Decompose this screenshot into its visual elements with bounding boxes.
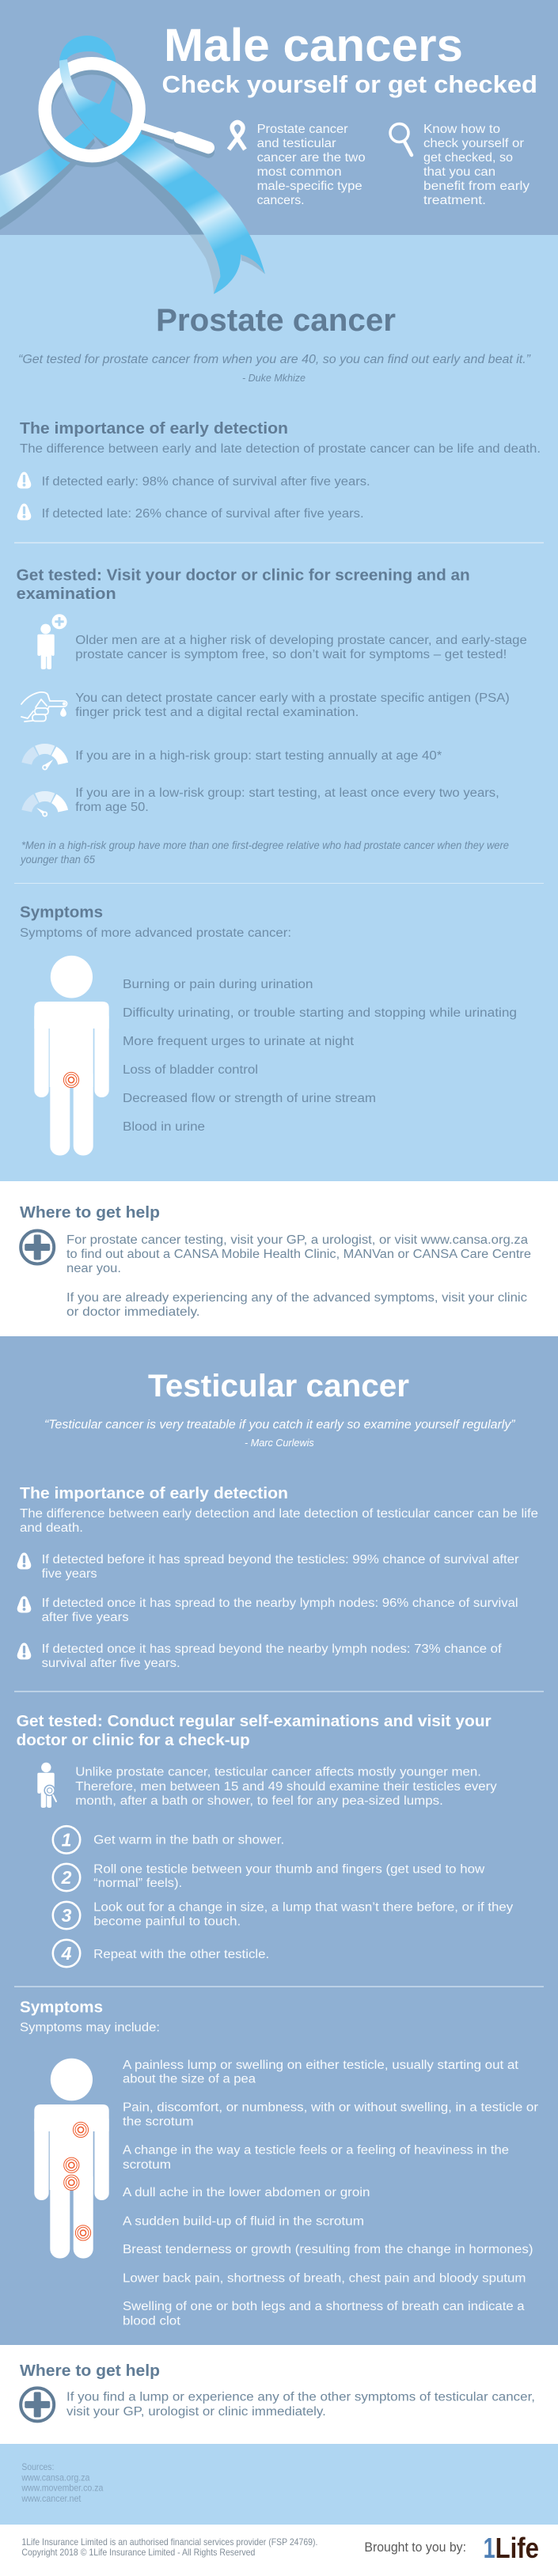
help text: visit your GP, urologist or clinic immediately. [66,2405,326,2419]
heading: The importance of early detection [20,1485,288,1502]
text block: know how to check: get checked, so [423,151,513,165]
step 2 [53,1862,485,1891]
text block: know how to check: check yourself or [423,137,524,150]
icon: alert [17,1642,31,1660]
heading: Where to get help [20,2362,160,2380]
intro text: Symptoms of more advanced prostate cancer: [20,926,291,940]
symptom list: Decreased flow or strength of urine stream [123,1092,376,1105]
text: PSA test: finger prick test and a digital rectal examination. [75,706,359,719]
quote: Duke Mkhize [18,353,531,384]
heading: prostate cancer: Prostate cancer [156,303,396,338]
icon: alert [17,1552,31,1570]
step 3 [53,1901,513,1929]
help text: If you are already experiencing any of the advanced symptoms, visit your clinic [66,1291,527,1305]
icon: low risk gauge [27,797,63,816]
text: older men [75,634,527,661]
text block: two most common cancers: most common [257,165,342,179]
sources: www.cansa.org.za [21,2472,90,2483]
symptom list: A dull ache in the lower abdomen or groin [123,2186,370,2199]
sources: Sources: [21,2461,54,2472]
intro text: Symptoms may include: [20,2021,160,2035]
text: low risk group: If you are in a low-risk group: start testing, at least once every two years, [75,786,499,800]
symptom list: Breast tenderness or growth (resulting from the change in hormones) [123,2243,533,2256]
text: older men: Older men are at a higher risk of developing prostate cancer, and early-stage [75,634,527,647]
text: PSA test: You can detect prostate cancer early with a prostate specific antigen (PSA) [75,691,510,705]
quote: Duke Mkhize: - Duke Mkhize [242,373,306,384]
heading: Symptoms [20,1999,103,2017]
symptom list: A change in the way a testicle feels or a feeling of heaviness in the [123,2143,509,2157]
text block: two most common cancers: and testicular [257,137,336,150]
section: prostate where to get help [20,1204,531,1319]
section: prostate symptoms [20,903,517,1155]
symptom list: scrotum [123,2158,171,2172]
symptom list: Swelling of one or both legs and a shortness of breath can indicate a [123,2300,525,2313]
symptom list: Difficulty urinating, or trouble starting and stopping while urinating [123,1006,517,1020]
section: testicular importance of early detection [17,1485,538,1670]
intro text: The difference between early detection and late detection of testicular cancer can be life [20,1507,538,1521]
text: younger men: Unlike prostate cancer, testicular cancer affects mostly younger men. [75,1766,481,1779]
text block: two most common cancers: male-specific type [257,180,363,193]
step 2: Roll one testicle between your thumb and fingers (get used to how [93,1862,485,1877]
step 4 [53,1940,269,1967]
heading: doctor or clinic for a check-up [17,1732,250,1749]
intro text [20,1507,538,1535]
step 4: Repeat with the other testicle. [93,1948,269,1961]
icon: alert [17,472,31,489]
symptom list: Blood in urine [123,1120,205,1134]
icon: body figure with prostate target [34,956,109,1155]
panel: footer background [0,2525,558,2576]
symptom list: Lower back pain, shortness of breath, chest pain and bloody sputum [123,2271,526,2285]
text: younger men: month, after a bath or shower, to feel for any pea-sized lumps. [75,1794,443,1808]
icon: alert [17,503,31,521]
icon: man with magnifier [37,1763,56,1808]
text block: two most common cancers: cancers. [257,194,305,207]
icon: alert [17,1597,31,1612]
heading [17,566,470,603]
heading: Where to get help [20,1204,160,1222]
step 1 [53,1826,284,1854]
quote: Marc Curlewis: “Testicular cancer is very treatable if you catch it early so examine yourself regularly” [44,1419,515,1432]
symptom list [123,2059,538,2328]
panel: testicular where to get help background [0,2345,558,2444]
help text: or doctor immediately. [66,1305,200,1319]
text block: two most common cancers: Prostate cancer [257,123,348,136]
icon: small magnifier [390,123,412,155]
panel: sources background [0,2444,558,2525]
step 2: “normal” feels). [93,1877,182,1890]
stat: before spread [42,1553,519,1581]
icon: plus circle [21,2388,54,2421]
footnote: *Men in a high-risk group have more than one first-degree relative who had prostate cancer when they were [21,839,509,851]
section: testicular where to get help [20,2362,535,2421]
symptom list: the scrotum [123,2116,193,2129]
icon: body figure with four targets [34,2059,109,2258]
footer legal text [21,2536,317,2558]
stat: beyond lymph nodes [42,1642,502,1670]
text block: know how to check: Know how to [423,123,500,136]
quote: Marc Curlewis [44,1419,515,1449]
step 3: Look out for a change in size, a lump that wasn’t there before, or if they [93,1901,513,1915]
section: prostate get tested [17,566,527,866]
panel: prostate cancer background [0,235,558,1181]
quote: Duke Mkhize: “Get tested for prostate cancer from when you are 40, so you can find out early and beat it.” [18,353,531,366]
icon: small ribbon [229,122,245,150]
footer legal text: 1Life Insurance Limited is an authorised financial services provider (FSP 24769). [21,2536,317,2548]
icon: awareness ribbon with magnifying glass [0,36,265,294]
text block: two most common cancers: cancer are the two [257,151,366,165]
heading: Get tested: Conduct regular self-examinations and visit your [17,1713,492,1730]
symptom list: about the size of a pea [123,2073,256,2086]
step 2: 2 [61,1867,72,1888]
text block: know how to check: treatment. [423,194,486,207]
heading: testicular cancer: Testicular cancer [148,1369,409,1404]
heading: The importance of early detection [20,420,288,438]
stat: beyond lymph nodes: If detected once it has spread beyond the nearby lymph nodes: 73% chance of [42,1642,502,1656]
symptom list: Pain, discomfort, or numbness, with or without swelling, in a testicle or [123,2101,538,2114]
panel: prostate where to get help background [0,1181,558,1336]
footnote: younger than 65 [20,854,95,866]
section: prostate importance of early detection [17,420,541,521]
help text: If you find a lump or experience any of the other symptoms of testicular cancer, [66,2390,535,2404]
icon: finger prick hand [21,692,67,722]
text block: two most common cancers [257,123,366,207]
stat: before spread: five years [42,1567,97,1581]
brought to you by: Brought to you by: [364,2540,466,2555]
heading: examination [17,585,116,603]
heading [17,1713,492,1749]
text: PSA test [75,691,510,719]
icon: man with plus [37,614,66,669]
help text [66,2390,535,2419]
symptom list: blood clot [123,2314,181,2328]
footnote [20,839,509,866]
text block: know how to check: benefit from early [423,180,530,193]
help text [66,1233,531,1319]
stat: nearby lymph nodes [42,1597,518,1624]
sources [21,2461,104,2504]
help text: For prostate cancer testing, visit your GP, a urologist, or visit www.cansa.org.za [66,1233,528,1247]
quote: Marc Curlewis: - Marc Curlewis [245,1438,314,1449]
stat: before spread: If detected before it has spread beyond the testicles: 99% chance of survival after [42,1553,519,1566]
text: low risk group [75,786,499,814]
help text: near you. [66,1262,121,1275]
panel: header background [0,0,558,235]
heading: Get tested: Visit your doctor or clinic for screening and an [17,566,470,584]
sources: www.cancer.net [21,2493,82,2504]
step 1: Get warm in the bath or shower. [93,1834,284,1847]
panel: testicular cancer background [0,1336,558,2345]
symptom list: More frequent urges to urinate at night [123,1035,355,1048]
sources: www.movember.co.za [21,2483,104,2494]
symptom list: Loss of bladder control [123,1063,258,1077]
symptom list: A sudden build-up of fluid in the scrotum [123,2214,364,2228]
heading: Symptoms [20,903,103,921]
stat: detected late: If detected late: 26% chance of survival after five years. [42,507,364,521]
symptom list: A painless lump or swelling on either testicle, usually starting out at [123,2059,519,2072]
text: low risk group: from age 50. [75,801,149,814]
section: testicular symptoms [20,1999,538,2328]
icon: plus circle [21,1231,54,1264]
text block: know how to check [423,123,530,207]
symptom list: Burning or pain during urination [123,978,313,991]
text: older men: prostate cancer is symptom free, so don’t wait for symptoms – get tested! [75,648,507,661]
stat: nearby lymph nodes: after five years [42,1611,129,1624]
title: Male cancers [164,20,463,71]
stat: beyond lymph nodes: survival after five years. [42,1657,180,1670]
logo: 1Life: Life [495,2532,539,2564]
step 1: 1 [62,1829,71,1850]
symptom list [123,978,517,1134]
icon: high risk gauge [27,749,63,770]
help text: to find out about a CANSA Mobile Health Clinic, MANVan or CANSA Care Centre [66,1248,531,1261]
section: testicular get tested [17,1713,513,1967]
footer legal text: Copyright 2018 © 1Life Insurance Limited - All Rights Reserved [21,2547,255,2558]
text: younger men [75,1766,497,1808]
intro text: and death. [20,1521,83,1535]
text block: know how to check: that you can [423,165,495,179]
logo: 1Life: 1 [484,2532,495,2564]
text: younger men: Therefore, men between 15 and 49 should examine their testicles every [75,1780,497,1794]
stat: detected early: If detected early: 98% chance of survival after five years. [42,475,370,489]
subtitle: Check yourself or get checked [161,70,537,98]
step 4: 4 [61,1943,72,1964]
step 3: become painful to touch. [93,1915,241,1928]
intro text: The difference between early and late detection of prostate cancer can be life and death. [20,442,541,456]
step 3: 3 [62,1905,72,1926]
stat: nearby lymph nodes: If detected once it has spread to the nearby lymph nodes: 96% chance of survival [42,1597,518,1610]
text: high risk group: If you are in a high-risk group: start testing annually at age 40* [75,749,442,763]
